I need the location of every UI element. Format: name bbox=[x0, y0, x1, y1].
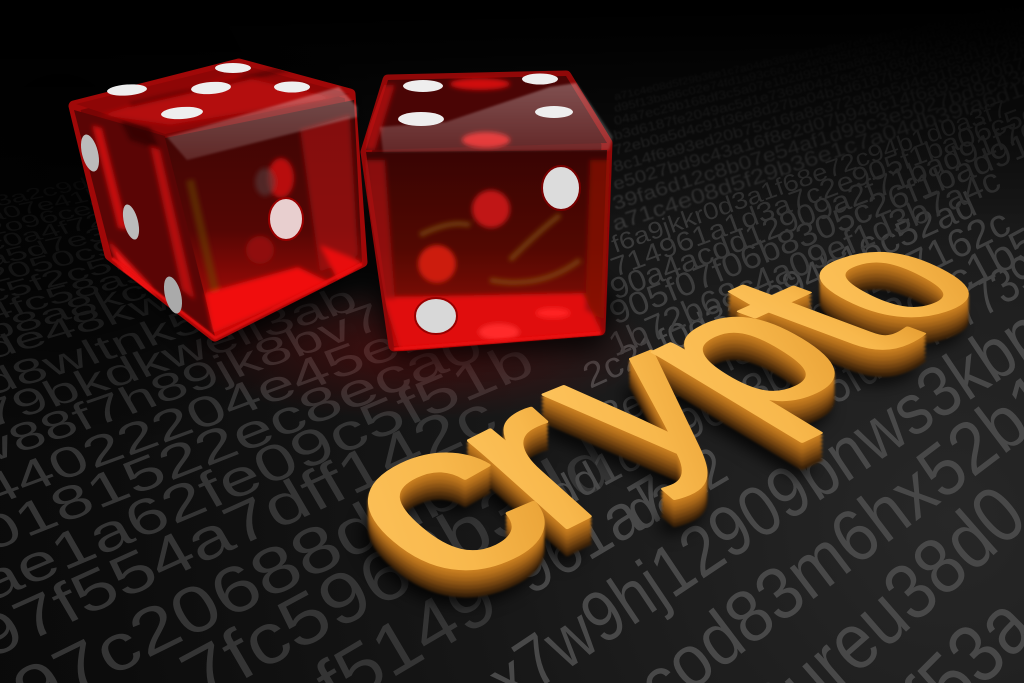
code text rows: right side: c8e21d7f3c60b9a4e7162c bbox=[575, 200, 1017, 448]
die left top face bbox=[76, 64, 350, 134]
dice shadow bbox=[120, 200, 620, 360]
die left glass highlight bbox=[167, 87, 357, 160]
die right front face bbox=[366, 150, 607, 346]
left vignette bbox=[0, 0, 500, 480]
die left silhouette bbox=[74, 64, 362, 336]
code text rows: upper right: f6a9jkkr0d3a1f68e72c94b1d0a3f7 bbox=[608, 96, 1011, 258]
3D word: crypto bbox=[256, 206, 1024, 627]
die right internal reflections bbox=[365, 78, 610, 350]
die right glass highlight bbox=[380, 83, 613, 152]
code text rows: upper right: 1b72b68c4a09ef1d3b7a4c bbox=[603, 161, 1006, 364]
3D word: crypto: t bbox=[645, 251, 979, 381]
die right top face bbox=[366, 76, 607, 150]
red glow on floor bbox=[180, 280, 660, 420]
die left side face bbox=[74, 110, 215, 336]
die: left bbox=[74, 63, 362, 338]
die right pips bbox=[398, 74, 580, 334]
code text rows: far blurred rows: a71c4e08d5f29b36e1c7a04db39fa6d12c8b07e54af1d96c3e5027bd9c43a16f8e bbox=[613, 0, 1024, 103]
die left internal reflections bbox=[92, 68, 362, 333]
3D word: crypto: r bbox=[383, 345, 672, 571]
die left pips bbox=[78, 63, 310, 315]
code text rows: right side: daa2 bbox=[615, 435, 738, 543]
code text rows: right side: 2c21f0d3a7e94b16c52ad bbox=[577, 184, 982, 396]
3D word: crypto: c bbox=[256, 372, 615, 627]
die: right bbox=[365, 74, 613, 350]
3D word: crypto: p bbox=[563, 257, 906, 449]
die right silhouette bbox=[366, 76, 607, 346]
die left bottom rim bbox=[112, 258, 362, 338]
code text rows: upper right: 905f07f06b8305c26f1bad91 bbox=[604, 127, 1024, 332]
die left front face bbox=[165, 100, 362, 336]
code text rows: right side: 961a7 bbox=[501, 461, 683, 608]
die right bottom rim bbox=[394, 333, 600, 349]
3D word: crypto: y bbox=[479, 296, 778, 503]
code text rows: left side bbox=[0, 137, 626, 683]
